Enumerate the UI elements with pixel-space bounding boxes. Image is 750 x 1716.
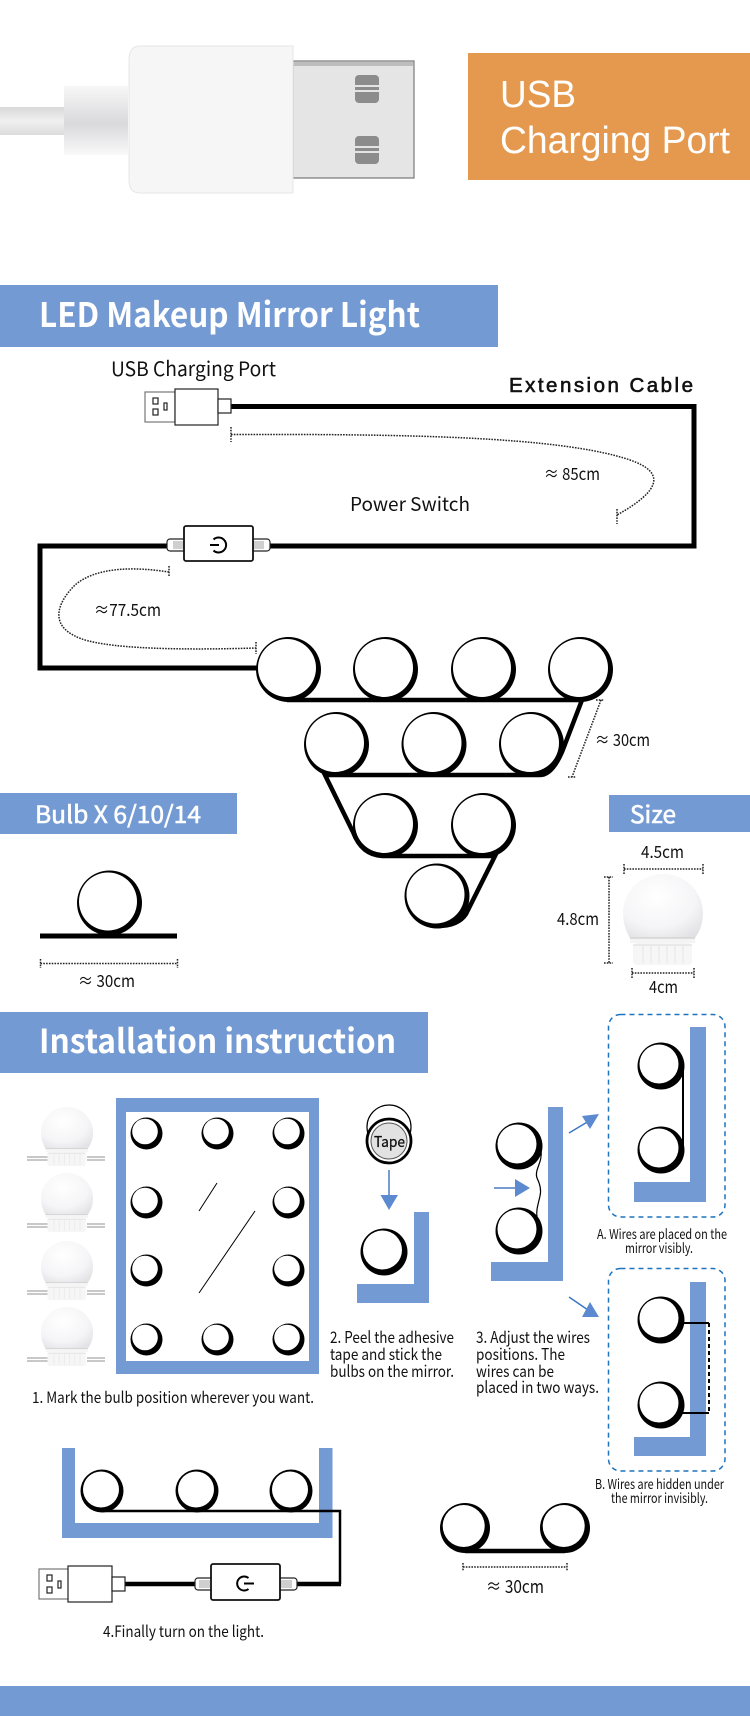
- diagram: bulb size: [557, 838, 703, 998]
- callout: USB Charging Port: [468, 53, 750, 180]
- heading: Size: [609, 795, 750, 832]
- dimension: approx 85cm: ≈ 85cm: [544, 460, 600, 485]
- text: step 2: bulbs on the mirror.: [330, 1358, 454, 1382]
- heading: Bulb X 6/10/14: Bulb X 6/10/14: [35, 795, 201, 830]
- dimension: approx 85cm: [231, 427, 654, 524]
- text: step 3: wires can be: [476, 1358, 554, 1382]
- text: step 2: tape and stick the: [330, 1341, 442, 1365]
- photos: four bulbs with wires: [27, 1107, 105, 1366]
- icon: tape: Tape: [374, 1131, 405, 1152]
- dimension: approx 77.5cm: [59, 566, 256, 654]
- icon: small USB plug: [145, 389, 231, 425]
- arrow: points to wire: [494, 1179, 530, 1197]
- text: step 2: [330, 1324, 454, 1382]
- text: step 3: 3. Adjust the wires: [476, 1324, 590, 1348]
- diagram: bulb size: 4.8cm: [557, 905, 599, 930]
- wire: main cable: [40, 406, 694, 668]
- dimension: approx 30cm between rows: ≈ 30cm: [595, 726, 650, 751]
- icon: power switch: [167, 526, 270, 561]
- text: step 3: placed in two ways.: [476, 1374, 599, 1398]
- bulb chain diagram: [256, 637, 613, 928]
- heading: LED Makeup Mirror Light: LED Makeup Mirror Light: [39, 288, 420, 337]
- dimension: approx 77.5cm: ≈77.5cm: [94, 596, 161, 621]
- diagram: single bulb spacing: ≈ 30cm: [78, 967, 135, 992]
- arrow: tape to mirror: [380, 1170, 398, 1210]
- diagram: loose wire between bulbs: [491, 1107, 563, 1281]
- text: step 3: [476, 1324, 599, 1398]
- label: USB Charging Port: USB Charging Port: [111, 353, 276, 382]
- text: option B caption: [595, 1473, 725, 1507]
- diagram: single bulb spacing: [40, 870, 178, 992]
- text: option B caption: the mirror invisibly.: [611, 1487, 708, 1507]
- label: Power Switch: Power Switch: [350, 490, 470, 517]
- heading: Installation instruction: Installation instruction: [39, 1015, 396, 1063]
- heading: LED Makeup Mirror Light: [0, 285, 498, 347]
- diagram: bulb in mirror corner: [357, 1212, 429, 1303]
- heading: Size: Size: [630, 795, 676, 830]
- text: step 3: positions. The: [476, 1341, 565, 1365]
- text: step 4: 4.Finally turn on the light.: [103, 1620, 264, 1642]
- photo: USB plug: [0, 46, 414, 193]
- diagram: two bulbs spacing: [440, 1503, 590, 1599]
- text: step 1: 1. Mark the bulb position wherever you want.: [32, 1386, 314, 1408]
- panel: option B, wires hidden: [608, 1268, 725, 1471]
- text: option A caption: [597, 1223, 727, 1257]
- text: option A caption: mirror visibly.: [625, 1237, 693, 1257]
- diagram: bulb size: 4.5cm: [641, 838, 684, 863]
- callout: USB Charging Port: USB: [500, 74, 576, 116]
- icon: step 4 power switch: [195, 1564, 297, 1600]
- arrow: to option A: [569, 1114, 599, 1133]
- diagram: bulb size: 4cm: [649, 973, 678, 998]
- footer band: [0, 1686, 750, 1716]
- label: Extension Cable: Extension Cable: [509, 374, 693, 397]
- diagram: two bulbs spacing: ≈ 30cm: [486, 1573, 544, 1599]
- icon: tape: [367, 1105, 411, 1163]
- icon: step 4 USB plug: [39, 1566, 125, 1602]
- heading: Installation instruction: [0, 1012, 428, 1073]
- dimension: approx 30cm between rows: [568, 700, 650, 777]
- diagram: mirror with marked bulb positions: [116, 1098, 319, 1374]
- arrow: to option B: [569, 1297, 599, 1317]
- heading: Bulb X 6/10/14: [0, 793, 237, 834]
- diagram: step 4 mirror with bulbs and wire: [62, 1448, 341, 1584]
- callout: USB Charging Port: Charging Port: [500, 120, 730, 162]
- panel: option A, wires visible: [608, 1014, 725, 1217]
- text: step 2: 2. Peel the adhesive: [330, 1324, 454, 1348]
